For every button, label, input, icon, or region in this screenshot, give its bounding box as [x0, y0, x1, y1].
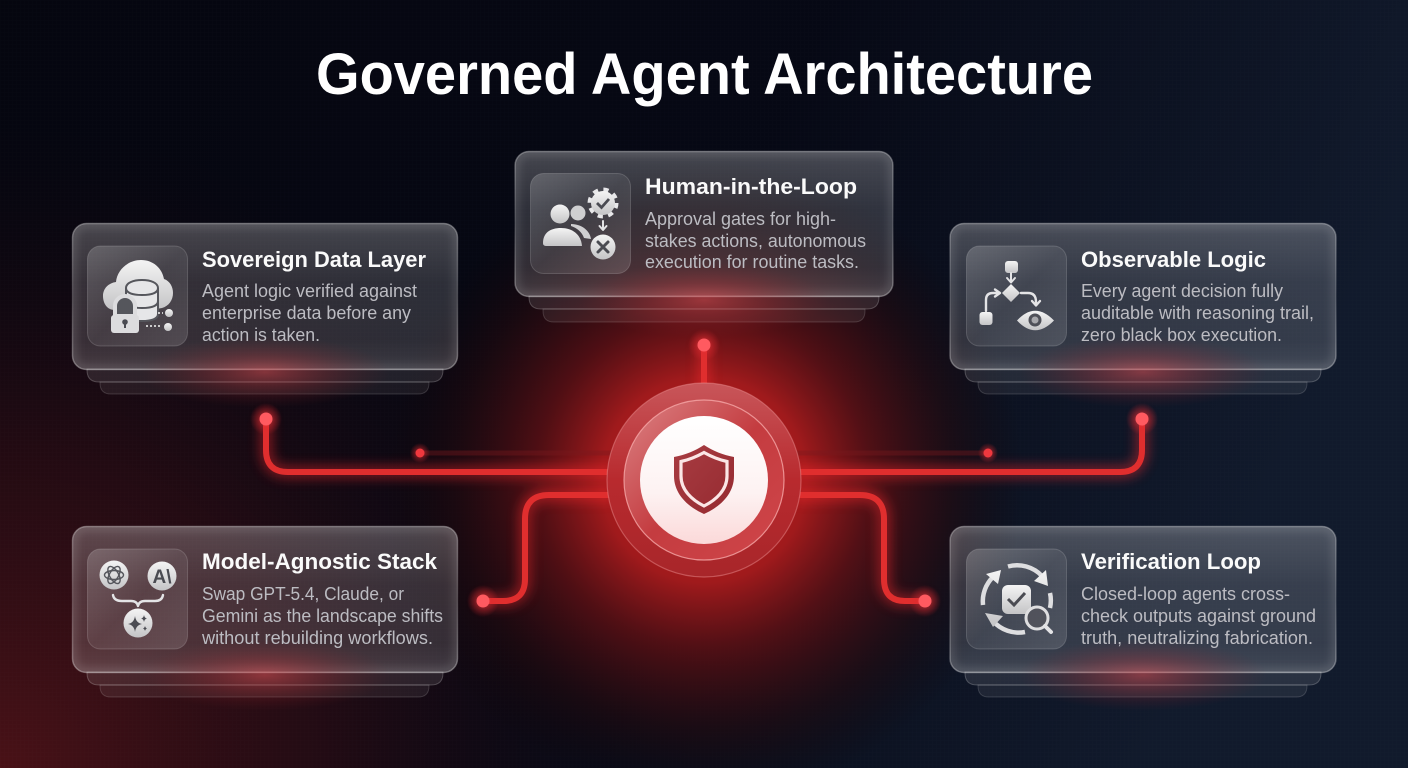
icon box: [530, 174, 630, 274]
description: enterprise data before any: [202, 303, 411, 323]
description: Approval gates for high-: [645, 209, 836, 229]
description: without rebuilding workflows.: [201, 628, 433, 648]
central red glow: [384, 160, 1024, 768]
description: Swap GPT-5.4, Claude, or: [202, 584, 404, 604]
heading: Model-Agnostic Stack: [202, 549, 438, 574]
icon: shield: [674, 445, 734, 514]
icon box: [88, 246, 188, 346]
card stack: [72, 526, 458, 711]
connector nodes: [250, 329, 1158, 617]
icon: people, approval gear, reject: [543, 190, 616, 260]
description: [1081, 584, 1316, 648]
icon: cloud database lock: [103, 260, 173, 333]
icon: decision flow with eye: [980, 261, 1054, 330]
panel: Verification Loop: [950, 526, 1336, 711]
description: action is taken.: [202, 325, 320, 345]
heading: Human-in-the-Loop: [645, 174, 857, 199]
panel: Sovereign Data Layer: [72, 224, 458, 408]
card stack: [950, 224, 1336, 408]
description: [202, 281, 417, 345]
card stack: [72, 224, 458, 408]
description: Agent logic verified against: [202, 281, 417, 301]
icon box: [966, 549, 1066, 649]
description: zero black box execution.: [1081, 325, 1282, 345]
description: truth, neutralizing fabrication.: [1081, 628, 1313, 648]
description: check outputs against ground: [1081, 606, 1316, 626]
icon box: [88, 549, 188, 649]
description: Every agent decision fully: [1081, 281, 1283, 301]
description: auditable with reasoning trail,: [1081, 303, 1314, 323]
card stack: [950, 526, 1336, 711]
heading: Sovereign Data Layer: [202, 247, 426, 272]
description: [201, 584, 443, 648]
description: execution for routine tasks.: [645, 252, 859, 272]
connector lines: [266, 345, 1142, 601]
icon: model logos merging: [100, 560, 176, 638]
description: stakes actions, autonomous: [645, 231, 866, 251]
description: Gemini as the landscape shifts: [202, 606, 443, 626]
panel: Observable Logic: [950, 224, 1336, 408]
title: Governed Agent Architecture: [316, 42, 1093, 107]
card stack: [515, 152, 893, 338]
heading: Verification Loop: [1081, 549, 1261, 574]
description: [645, 209, 866, 272]
icon box: [966, 246, 1066, 346]
description: [1081, 281, 1314, 345]
central shield hub: [607, 383, 801, 577]
description: Closed-loop agents cross-: [1081, 584, 1290, 604]
panel: Model-Agnostic Stack: [72, 526, 458, 711]
heading: Observable Logic: [1081, 247, 1266, 272]
icon: verification loop with magnifier: [983, 565, 1051, 633]
panel: Human-in-the-Loop: [515, 152, 893, 338]
icon: model logos merging: A\: [152, 567, 172, 588]
